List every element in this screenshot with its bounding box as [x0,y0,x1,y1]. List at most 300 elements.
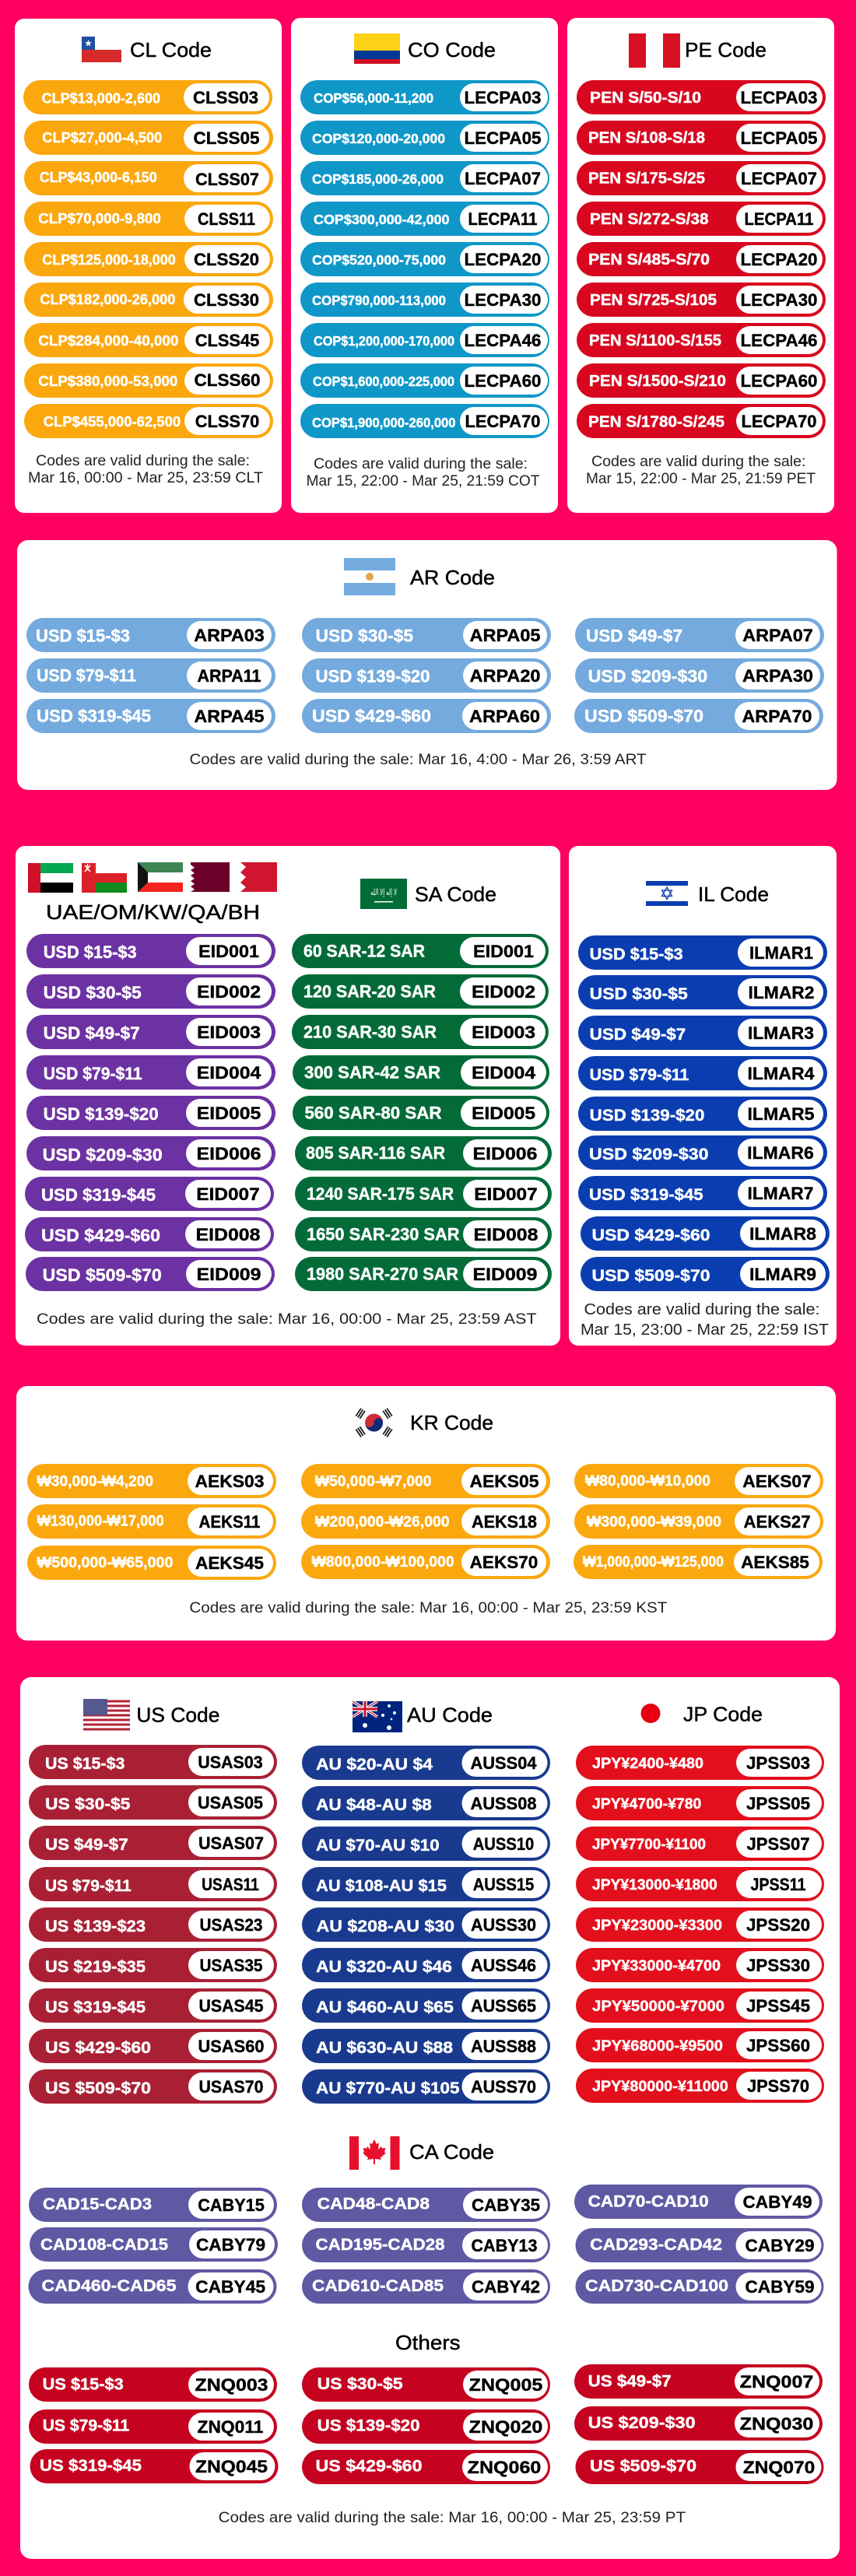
pill: USAS60 [29,2029,277,2063]
section: CA Code [28,2136,823,2304]
pill: CABY59: CABY59 [745,2277,814,2297]
pill: EID006: USD $209-$30 [43,1146,163,1164]
pill: AEKS05: ₩50,000-₩7,000 [315,1474,431,1490]
pill: AUSS10 [302,1827,550,1861]
pill: JPSS05 [576,1786,824,1820]
pill: CLSS05: CLP$27,000-4,500 [42,130,162,146]
pill: LECPA60 [577,363,826,398]
pill: JPSS05: JPSS05 [746,1794,810,1813]
pill: ZNQ030: ZNQ030 [740,2414,813,2434]
pill: AEKS45: AEKS45 [195,1553,264,1573]
pill: ILMAR4: USD $79-$11 [590,1066,689,1084]
pill: CLSS11: CLP$70,000-9,800 [38,211,161,226]
pill: AUSS70 [302,2069,550,2104]
pill: LECPA30: COP$790,000-113,000 [312,293,446,308]
pill: SA EID006: EID006 [473,1144,537,1163]
pill: CABY42: CAD610-CAD85 [312,2277,444,2295]
panel: CL Code [15,19,282,513]
pill: CABY29 [576,2228,823,2262]
pill: AUSS08: AUSS08 [470,1794,537,1813]
heading: US Code with flag [83,1699,219,1730]
pill: AUSS15: AUSS15 [473,1875,534,1894]
heading: AU Code with flag [353,1701,493,1732]
pill: SA EID004 [293,1055,549,1090]
pill: CABY42: CABY42 [472,2277,540,2297]
pill: LECPA05 [300,121,549,155]
pill: LECPA30: LECPA30 [464,290,542,310]
pill: LECPA07: PEN S/175-S/25 [588,170,705,187]
panel: PE Code [567,18,834,513]
pill: JPSS03: JPY¥2400-¥480 [592,1755,703,1772]
pill: CLSS30 [24,283,273,317]
pill: CLSS70 [24,404,273,438]
pill: USAS45: USAS45 [199,1996,263,2016]
pill: CABY59 [576,2269,823,2304]
pill: JPSS20: JPSS20 [746,1915,810,1935]
pill: USAS60: USAS60 [198,2037,265,2056]
pill: USAS07 [29,1826,277,1860]
pill: AUSS70: AUSS70 [471,2077,536,2097]
pill: ZNQ005: US $30-$5 [317,2374,403,2393]
note: PT validity: Codes are valid during the sale: Mar 16, 00:00 - Mar 25, 23:59 PT [219,2510,686,2526]
pill: ILMAR8 [581,1216,830,1251]
note: PE validity: Mar 15, 22:00 - Mar 25, 21:59 PET [586,471,816,487]
pill: EID003: EID003 [197,1023,261,1042]
section: SA Code [292,879,552,1291]
pill: AEKS45 [27,1546,276,1580]
pill: ZNQ003: US $15-$3 [43,2375,124,2394]
pill: EID001 [26,934,275,968]
pill: ILMAR3 [578,1016,827,1050]
pill: AEKS85: AEKS85 [741,1553,809,1572]
heading: PE Code with flag [629,33,767,68]
pill: EID008: USD $429-$60 [41,1226,160,1245]
pill: LECPA07: LECPA07 [741,169,817,188]
heading: Others: Others [395,2331,461,2354]
pill: LECPA20: COP$520,000-75,000 [312,252,446,268]
pill: SA EID005: EID005 [472,1104,535,1123]
pill: CLSS30: CLSS30 [194,290,259,310]
pill: ILMAR2: USD $30-$5 [590,985,688,1003]
pill: ZNQ005: ZNQ005 [469,2375,542,2395]
heading: PE Code with flag: PE Code [685,38,767,61]
pill: SA EID001: EID001 [473,942,534,961]
pill: JPSS11 [576,1867,824,1901]
pill: LECPA20 [577,242,826,276]
heading: SA Code with flag: لا إله إلا الله [370,888,397,897]
pill: CLSS20: CLP$125,000-18,000 [42,252,176,268]
pill: AUSS46: AUSS46 [471,1956,536,1975]
pill: AUSS65: AUSS65 [471,1996,536,2016]
heading: CL Code with flag: CL Code [130,38,212,61]
pill: JPSS70: JPSS70 [747,2076,809,2096]
pill: JPSS60: JPSS60 [746,2036,810,2055]
pill: CABY49 [574,2185,823,2219]
pill: CLSS30: CLP$182,000-26,000 [40,292,175,307]
pill: CABY35: CABY35 [472,2195,540,2215]
pill: AEKS11 [27,1504,276,1539]
pill: ZNQ003: ZNQ003 [195,2375,268,2395]
pill: CABY42 [302,2269,550,2304]
pill: ZNQ045: ZNQ045 [195,2457,268,2476]
heading: KR Code with flag: KR Code [410,1411,493,1434]
pill: USAS23 [29,1907,277,1942]
pill: SA EID009: EID009 [473,1265,537,1284]
pill: USAS03: US $15-$3 [45,1754,125,1773]
pill: ZNQ003 [29,2367,277,2402]
pill: LECPA05 [577,121,826,155]
section: US Code [29,1699,277,2104]
pill: CABY45: CABY45 [195,2277,265,2297]
pill: ILMAR1 [578,935,827,970]
pill: LECPA03 [300,80,549,114]
pill: CABY49: CAD70-CAD10 [588,2193,709,2210]
pill: JPSS11: JPY¥13000-¥1800 [592,1876,717,1893]
pill: ZNQ005 [302,2367,550,2402]
pill: AUSS88: AUSS88 [471,2037,536,2056]
pill: JPSS60 [576,2028,824,2062]
section: AU Code [302,1701,550,2104]
pill: EID002: USD $30-$5 [44,983,142,1002]
pill: LECPA03: COP$56,000-11,200 [314,90,433,106]
pill: JPSS45 [576,1988,824,2023]
pill: AEKS07: AEKS07 [742,1472,812,1491]
pill: LECPA05: LECPA05 [464,128,542,148]
pill: USAS07: USAS07 [198,1834,264,1853]
pill: ILMAR9: ILMAR9 [749,1265,816,1284]
pill: CLSS45 [24,323,273,357]
pill: JPSS03 [576,1746,824,1780]
pill: ILMAR6 [578,1135,827,1170]
pill: EID001: USD $15-$3 [44,942,137,962]
pill: USAS23: USAS23 [199,1915,263,1935]
pill: ARPA20 [302,658,551,693]
pill: LECPA05: LECPA05 [741,128,817,148]
pill: ZNQ020: ZNQ020 [469,2417,542,2437]
pill: CABY59: CAD730-CAD100 [585,2277,728,2295]
pill: USAS11 [29,1867,277,1901]
pill: CABY35 [302,2188,550,2222]
pill: USAS05: US $30-$5 [45,1795,130,1813]
pill: ZNQ020: US $139-$20 [317,2416,420,2434]
pill: LECPA03: LECPA03 [464,88,542,107]
pill: ILMAR6: USD $209-$30 [589,1146,709,1163]
pill: ZNQ070 [576,2450,823,2484]
pill: ARPA30: ARPA30 [742,666,813,686]
pill: CABY79 [30,2227,278,2262]
note: PE validity: Codes are valid during the sale: [591,454,806,470]
pill: AUSS30: AUSS30 [471,1915,536,1935]
pill: LECPA30: PEN S/725-S/105 [590,292,717,309]
panel: IL Code [569,846,837,1346]
pill: ARPA45: USD $319-$45 [37,707,151,725]
pill: CLSS20 [24,242,273,276]
pill: CABY49: CABY49 [742,2192,812,2212]
pill: SA EID004: EID004 [472,1063,536,1083]
heading: CA Code with flag [349,2136,494,2170]
pill: CLSS60: CLP$380,000-53,000 [38,374,177,389]
pill: EID003: USD $49-$7 [44,1023,140,1043]
pill: CABY29: CAD293-CAD42 [590,2236,722,2254]
pill: AEKS45: ₩500,000-₩65,000 [37,1555,173,1571]
pill: USAS23: US $139-$23 [45,1917,146,1936]
pill: CABY13 [302,2228,550,2262]
pill: JPSS70: JPY¥80000-¥11000 [592,2078,728,2095]
pill: EID006 [26,1136,275,1170]
pill: ILMAR4 [578,1056,827,1090]
pill: LECPA03: PEN S/50-S/10 [590,89,701,107]
pill: ZNQ045: US $319-$45 [40,2456,142,2475]
pill: CABY13: CABY13 [472,2236,537,2255]
pill: SA EID004: 300 SAR-42 SAR [304,1063,440,1082]
pill: CLSS03: CLP$13,000-2,600 [42,90,160,106]
pill: LECPA30 [577,283,826,317]
section: Others [29,2331,823,2484]
heading: AR Code with flag: AR Code [410,566,495,589]
panel: US, AU, JP, CA and Others Codes [20,1677,840,2559]
pill: ILMAR9 [581,1257,830,1291]
pill: SA EID002: 120 SAR-20 SAR [303,982,436,1001]
pill: AUSS15 [302,1867,550,1901]
pill: AEKS70: AEKS70 [470,1553,538,1572]
pill: AUSS88: AU $630-AU $88 [316,2038,453,2057]
pill: ZNQ007: US $49-$7 [588,2372,672,2391]
icon: Bahrain flag [240,862,277,892]
pill: AUSS65 [302,1988,550,2023]
pill: LECPA07: COP$185,000-26,000 [312,171,444,187]
pill: EID009: EID009 [196,1265,261,1284]
pill: USAS35: US $219-$35 [45,1957,146,1976]
pill: AUSS04: AU $20-AU $4 [316,1755,433,1774]
pill: LECPA07 [300,161,549,195]
note: CL validity: Mar 16, 00:00 - Mar 25, 23:59 CLT [28,470,263,486]
pill: ARPA03: ARPA03 [194,626,265,645]
pill: LECPA46: LECPA46 [741,331,817,350]
pill: LECPA70: PEN S/1780-S/245 [588,414,724,431]
pill: LECPA20: LECPA20 [464,250,542,269]
pill: ILMAR8: USD $429-$60 [591,1227,710,1244]
pill: LECPA60: LECPA60 [741,371,817,391]
pill: ILMAR4: ILMAR4 [747,1064,815,1083]
pill: ARPA11: ARPA11 [198,666,261,686]
pill: EID008 [25,1217,274,1251]
pill: JPSS30: JPY¥33000-¥4700 [592,1957,721,1974]
pill: ILMAR2: ILMAR2 [749,983,814,1002]
pill: LECPA46: COP$1,200,000-170,000 [314,333,454,349]
pill: AUSS46: AU $320-AU $46 [316,1957,452,1976]
pill: LECPA07 [577,161,826,195]
pill: SA EID002: EID002 [472,982,535,1002]
pill: SA EID003: 210 SAR-30 SAR [303,1023,437,1041]
pill: ARPA11 [26,658,275,693]
pill: LECPA11 [577,202,826,236]
heading: UAE/OM/KW/QA/BH: UAE/OM/KW/QA/BH [46,900,260,924]
pill: LECPA46: PEN S/1100-S/155 [589,332,721,349]
pill: CLSS20: CLSS20 [194,250,259,269]
pill: ARPA05: USD $30-$5 [316,626,413,646]
pill: ARPA11: USD $79-$11 [37,666,136,686]
pill: CLSS03 [23,80,272,114]
pill: AUSS10: AUSS10 [473,1834,534,1854]
note: IL validity: Mar 15, 23:00 - Mar 25, 22:59 IST [581,1321,829,1339]
pill: USAS70 [29,2069,277,2104]
note: CO validity: Mar 15, 22:00 - Mar 25, 21:59 COT [307,473,540,490]
heading: SA Code with flag: SA Code [415,883,496,906]
pill: ARPA30: USD $209-$30 [588,666,707,686]
pill: AUSS10: AU $70-AU $10 [316,1836,440,1855]
pill: AUSS30: AU $208-AU $30 [316,1917,454,1936]
pill: USAS03 [29,1745,277,1779]
pill: ZNQ045 [30,2449,279,2483]
pill: SA EID007: 1240 SAR-175 SAR [307,1184,454,1203]
pill: EID007: EID007 [196,1184,260,1204]
pill: ZNQ030: US $209-$30 [588,2413,696,2432]
pill: EID004: USD $79-$11 [44,1064,142,1083]
heading: AR Code with flag [344,558,495,595]
pill: AEKS27: AEKS27 [744,1512,811,1532]
pill: ZNQ070: US $509-$70 [590,2456,696,2475]
pill: AUSS65: AU $460-AU $65 [316,1998,454,2016]
pill: JPSS20 [576,1907,824,1942]
pill: LECPA05: COP$120,000-20,000 [312,131,445,146]
pill: USAS70: US $509-$70 [45,2079,151,2097]
pill: AUSS70: AU $770-AU $105 [316,2079,460,2097]
pill: ARPA45 [26,699,275,733]
pill: AEKS05: AEKS05 [470,1472,539,1491]
pill: ZNQ011: US $79-$11 [43,2416,129,2434]
pill: ZNQ060 [302,2450,550,2484]
pill: CLSS07 [24,161,273,195]
pill: AEKS03 [27,1464,276,1498]
note: KR validity: Codes are valid during the sale: Mar 16, 00:00 - Mar 25, 23:59 KST [189,1600,668,1616]
pill: LECPA70: LECPA70 [465,412,540,431]
pill: SA EID009: 1980 SAR-270 SAR [307,1264,458,1284]
pill: ZNQ070: ZNQ070 [743,2458,815,2477]
pill: CABY15: CABY15 [198,2195,265,2215]
pill: SA EID006 [295,1136,552,1170]
pill: AUSS04 [302,1746,550,1780]
heading: KR Code with flag [356,1409,493,1437]
pill: JPSS20: JPY¥23000-¥3300 [592,1917,722,1934]
pill: ARPA03: USD $15-$3 [36,626,130,646]
pill: AEKS85 [574,1545,823,1579]
pill: AEKS03: AEKS03 [195,1472,265,1491]
pill: ARPA20: USD $139-$20 [316,666,430,686]
pill: USAS03: USAS03 [198,1753,263,1772]
pill: USAS45: US $319-$45 [45,1998,146,2016]
pill: ARPA60: USD $429-$60 [312,707,431,725]
pill: ILMAR1: USD $15-$3 [590,946,683,963]
pill: JPSS60: JPY¥68000-¥9500 [592,2037,723,2055]
pill: ILMAR5: ILMAR5 [747,1104,814,1124]
pill: CABY35: CAD48-CAD8 [317,2195,430,2213]
pill: USAS45 [29,1988,277,2023]
pill: ZNQ060: ZNQ060 [468,2458,541,2477]
pill: ARPA70: ARPA70 [742,707,812,726]
pill: JPSS07: JPSS07 [747,1834,809,1854]
note: CL validity: Codes are valid during the sale: [36,453,250,469]
pill: SA EID008: EID008 [473,1225,539,1244]
pill: USAS60: US $429-$60 [45,2038,151,2057]
note: AR validity: Codes are valid during the sale: Mar 16, 4:00 - Mar 26, 3:59 ART [190,752,647,768]
pill: SA EID007: EID007 [474,1184,538,1204]
pill: SA EID003: EID003 [472,1023,535,1042]
pill: EID009 [26,1257,275,1291]
pill: CLSS70: CLSS70 [195,412,259,431]
pill: EID003 [26,1015,275,1049]
pill: CABY29: CABY29 [745,2236,814,2255]
pill: ILMAR7 [578,1176,827,1210]
pill: EID007: USD $319-$45 [41,1185,156,1205]
pill: ARPA60: ARPA60 [469,707,540,726]
pill: AUSS04: AUSS04 [470,1753,537,1773]
pill: LECPA11: LECPA11 [744,209,814,229]
pill: LECPA46 [577,323,826,357]
pill: LECPA11: PEN S/272-S/38 [590,211,708,228]
note: IL validity: Codes are valid during the sale: [584,1300,820,1318]
pill: LECPA11: LECPA11 [468,209,537,229]
pill: SA EID002 [292,974,549,1009]
pill: ZNQ007 [574,2364,823,2399]
pill: SA EID008 [295,1217,552,1251]
pill: AEKS05 [301,1464,550,1498]
heading: JP Code with flag [641,1703,763,1726]
pill: ILMAR1: ILMAR1 [749,943,813,963]
pill: JPSS11: JPSS11 [750,1875,806,1894]
heading: CA Code with flag: CA Code [409,2140,494,2164]
pill: JPSS07: JPY¥7700-¥1100 [592,1836,706,1853]
pill: ARPA60 [302,699,551,733]
pill: ARPA70 [574,699,823,733]
pill: JPSS45: JPSS45 [746,1996,810,2016]
pill: ARPA30 [575,658,824,693]
pill: CLSS60 [24,363,273,398]
pill: EID004 [26,1055,275,1090]
pill: LECPA11: COP$300,000-42,000 [314,212,450,227]
pill: USAS70: USAS70 [199,2077,263,2097]
pill: ARPA03 [26,618,275,652]
pill: LECPA03 [577,80,826,114]
pill: SA EID005 [293,1096,549,1130]
pill: AEKS18 [301,1504,550,1539]
pill: AUSS30 [302,1907,550,1942]
pill: CLSS70: CLP$455,000-62,500 [44,414,181,430]
pill: AEKS85: ₩1,000,000-₩125,000 [583,1554,724,1571]
pill: EID005: EID005 [197,1104,261,1123]
pill: EID007 [25,1177,274,1211]
pill: AEKS03: ₩30,000-₩4,200 [37,1474,153,1490]
pill: JPSS70 [576,2069,824,2103]
heading: CO Code with flag: CO Code [408,38,496,61]
pill: LECPA60: PEN S/1500-S/210 [589,373,726,390]
pill: AEKS18: AEKS18 [472,1512,537,1532]
pill: ARPA70: USD $509-$70 [584,707,703,725]
pill: ZNQ060: US $429-$60 [316,2456,423,2475]
pill: AUSS88 [302,2029,550,2063]
pill: ILMAR7: ILMAR7 [747,1184,814,1203]
pill: CLSS05: CLSS05 [193,128,260,148]
pill: EID004: EID004 [197,1063,261,1083]
pill: CLSS07: CLSS07 [195,170,259,189]
pill: ILMAR8: ILMAR8 [749,1224,816,1244]
pill: AUSS46 [302,1948,550,1982]
pill: LECPA20 [300,242,549,276]
icon: UAE flag [28,863,73,893]
pill: CABY79: CAD108-CAD15 [40,2236,168,2254]
pill: AEKS07: ₩80,000-₩10,000 [585,1473,710,1490]
pill: CLSS45: CLP$284,000-40,000 [38,333,178,349]
pill: ILMAR6: ILMAR6 [747,1143,814,1163]
